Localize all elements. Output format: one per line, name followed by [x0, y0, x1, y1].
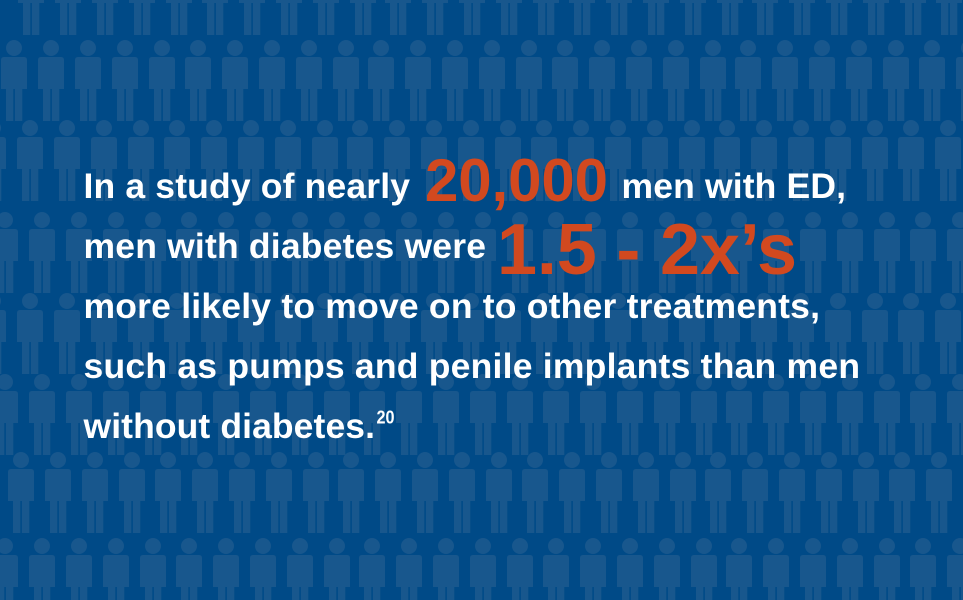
text line 1: men with ED,	[622, 166, 846, 206]
text line 4: such as pumps and penile implants than men	[84, 346, 860, 386]
highlight number: 20,000: 20,000	[425, 147, 608, 214]
text line 3: more likely to move on to other treatments,	[84, 286, 820, 326]
highlight number: 1.5 - 2x's: 1.5 - 2x’s	[497, 210, 797, 290]
text line 2: men with diabetes were	[84, 226, 486, 266]
text line 2	[84, 210, 797, 290]
text line 1: In a study of nearly	[84, 166, 410, 206]
text line 1	[84, 147, 846, 214]
statement text block	[82, 147, 860, 446]
text line 5 with citation: 20	[376, 408, 394, 428]
text line 5 with citation: without diabetes.	[82, 406, 375, 446]
